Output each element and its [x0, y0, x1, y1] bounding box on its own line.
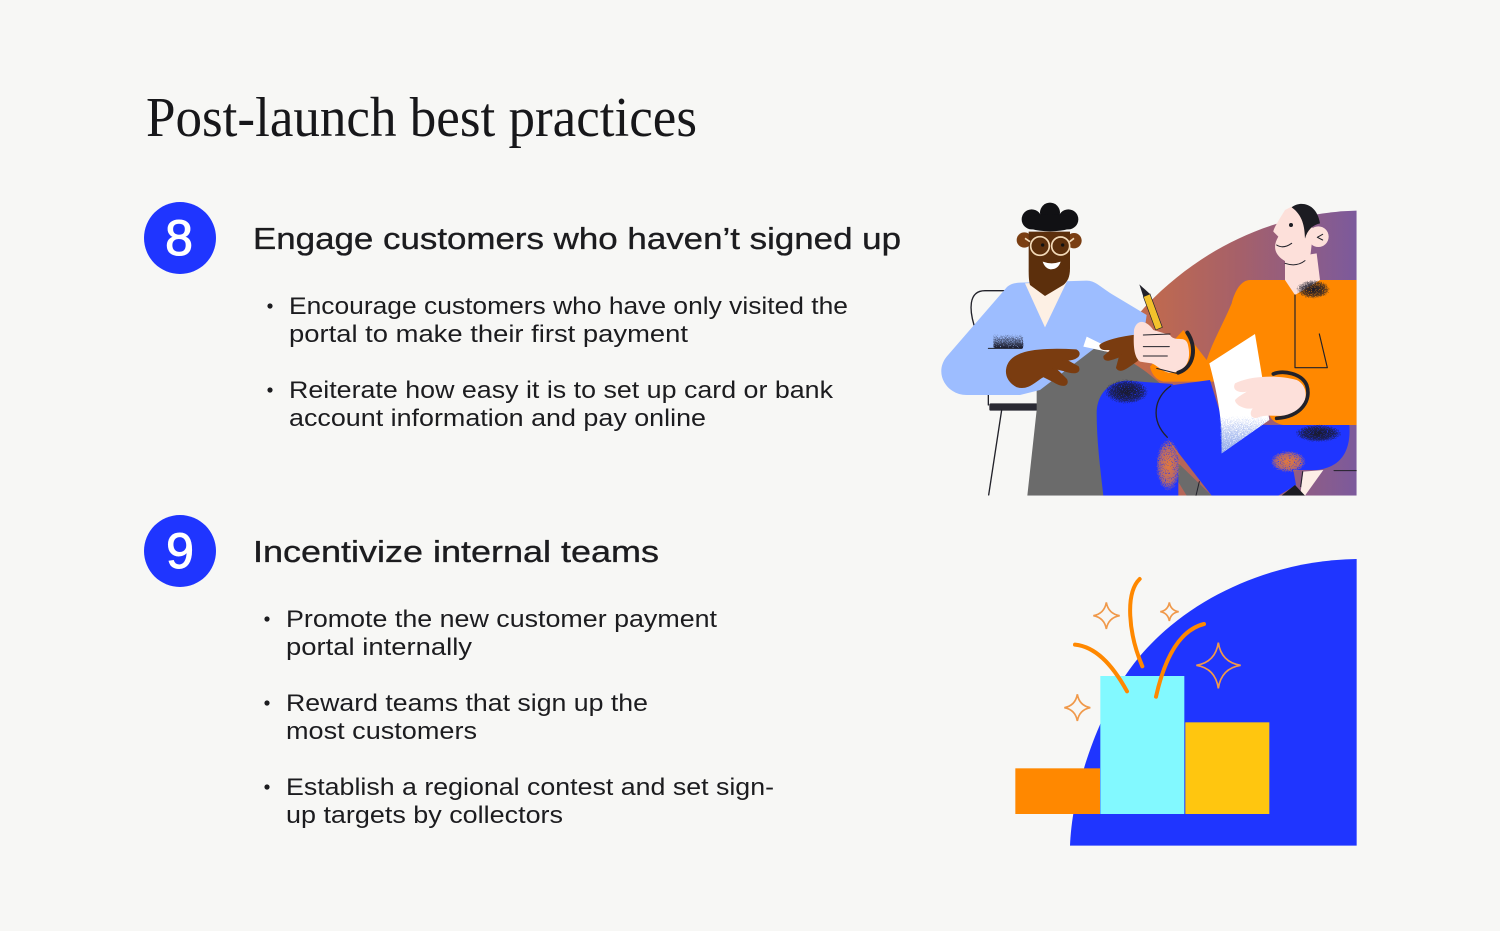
left person collar	[1025, 281, 1067, 327]
left person trousers	[1027, 347, 1160, 496]
bullet: promote portal	[264, 606, 717, 661]
blue arc backdrop	[1070, 559, 1357, 846]
trousers shading	[1100, 377, 1347, 497]
title: Post-launch best practices	[146, 87, 697, 149]
bullet: promote portal: portal internally	[286, 634, 473, 661]
left person head	[1017, 203, 1082, 296]
smile	[1043, 262, 1061, 269]
paper corner	[1084, 336, 1110, 352]
sparkle stars	[1064, 602, 1241, 721]
bullet: regional contest: Establish a regional contest and set sign-	[286, 774, 774, 801]
number badge 9	[144, 515, 216, 587]
right person shirt seams	[1294, 280, 1330, 368]
heading: engage customers: Engage customers who haven’t signed up	[253, 221, 901, 256]
yellow bar	[1185, 722, 1269, 814]
illustration: two people talking	[941, 203, 1357, 497]
glasses	[1025, 237, 1074, 255]
bullet: first payment: Encourage customers who have only visited the	[289, 293, 848, 320]
section 9: incentivize teams	[144, 515, 774, 829]
number badge 9: 9	[166, 523, 194, 579]
paper sheet	[1209, 334, 1269, 453]
right person trousers	[1097, 380, 1350, 496]
bullet: reward teams: most customers	[286, 718, 477, 745]
number badge 8	[144, 202, 216, 274]
bullet: easy setup: account information and pay online	[289, 405, 706, 432]
left person sweater shading	[988, 334, 1024, 349]
right person neck	[1285, 253, 1320, 295]
bullet: first payment	[267, 293, 848, 348]
cyan bar	[1100, 676, 1184, 814]
left person sweater	[941, 281, 1147, 395]
bullet: regional contest: up targets by collectors	[286, 802, 563, 829]
right person chair and shoe	[1196, 470, 1357, 496]
left person chair	[971, 291, 1038, 495]
bullet: easy setup	[267, 377, 834, 432]
pencil	[1139, 284, 1162, 330]
right person shirt	[1150, 280, 1357, 425]
bullet: reward teams	[264, 690, 648, 745]
gradient arc backdrop	[1100, 211, 1357, 496]
heading: incentivize teams: Incentivize internal teams	[253, 534, 659, 569]
left person hands	[1007, 336, 1138, 387]
bullet: regional contest	[264, 774, 774, 829]
bullet: reward teams: Reward teams that sign up the	[286, 690, 648, 717]
number badge 8: 8	[165, 210, 193, 266]
hair	[1022, 203, 1078, 231]
section 8: engage customers	[144, 202, 901, 432]
orange bar	[1015, 768, 1100, 814]
bullet: easy setup: Reiterate how easy it is to set up card or bank	[289, 377, 834, 404]
pencil hand	[1134, 322, 1193, 373]
right person head	[1273, 204, 1329, 265]
illustration: podium with fireworks	[1015, 559, 1357, 846]
paper hand	[1234, 372, 1308, 418]
firework streaks	[1075, 579, 1204, 697]
bullet: first payment: portal to make their first payment	[289, 321, 688, 348]
bullet: promote portal: Promote the new customer payment	[286, 606, 717, 633]
